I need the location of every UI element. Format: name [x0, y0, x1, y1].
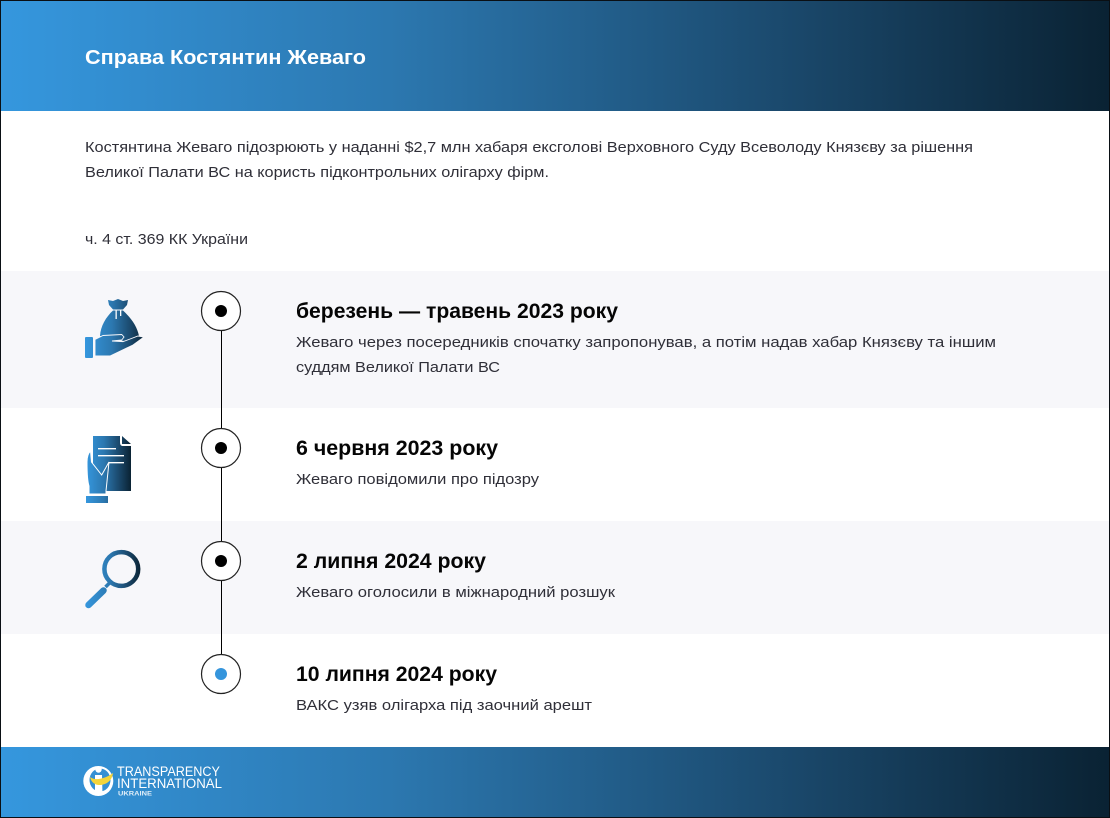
logo emblem	[83, 766, 113, 796]
header banner	[0, 0, 1110, 111]
icon: magnifying glass	[88, 552, 138, 605]
row 1 text	[296, 300, 996, 376]
row 1 text: суддям Великої Палати ВС	[296, 359, 500, 376]
row 3 text: Жеваго оголосили в міжнародний розшук	[296, 584, 615, 601]
row background 1	[0, 271, 1110, 408]
row background 3	[0, 521, 1110, 634]
icon: money bag in hand	[85, 299, 144, 358]
row 2 text: 6 червня 2023 року	[296, 437, 498, 460]
intro text	[85, 139, 973, 181]
icon: document in hand	[86, 436, 131, 503]
logo wordmark: TRANSPARENCY	[117, 764, 220, 779]
intro text: Костянтина Жеваго підозрюють у наданні $2,7 млн хабаря ексголові Верховного Суду Всеволоду Князєву за рішення	[85, 139, 973, 156]
row 4 text: 10 липня 2024 року	[296, 663, 497, 686]
row 1 text: Жеваго через посередників спочатку запропонував, а потім надав хабар Князєву та іншим	[296, 334, 996, 351]
row 4 text	[296, 663, 592, 714]
logo wordmark	[117, 764, 222, 798]
marker 4	[202, 654, 240, 694]
timeline line	[221, 311, 222, 674]
logo wordmark: UKRAINE	[118, 792, 152, 798]
row 4 text: ВАКС узяв олігарха під заочний арешт	[296, 697, 592, 714]
row 3 text: 2 липня 2024 року	[296, 550, 486, 573]
logo: Transparency International Ukraine	[83, 764, 222, 798]
intro text: Великої Палати ВС на користь підконтрольних олігарху фірм.	[85, 164, 549, 181]
footer banner	[0, 747, 1110, 818]
logo wordmark: INTERNATIONAL	[117, 776, 222, 791]
marker 3	[202, 542, 240, 580]
row 3 text	[296, 550, 615, 601]
row 2 text: Жеваго повідомили про підозру	[296, 471, 540, 488]
row 2 text	[296, 437, 540, 488]
marker 1	[202, 292, 240, 330]
row 1 text: березень — травень 2023 року	[296, 300, 618, 323]
title: Справа Костянтин Жеваго	[85, 47, 366, 69]
timeline	[202, 292, 240, 694]
marker 2	[202, 428, 240, 468]
legal article reference: ч. 4 ст. 369 КК України	[85, 231, 248, 248]
